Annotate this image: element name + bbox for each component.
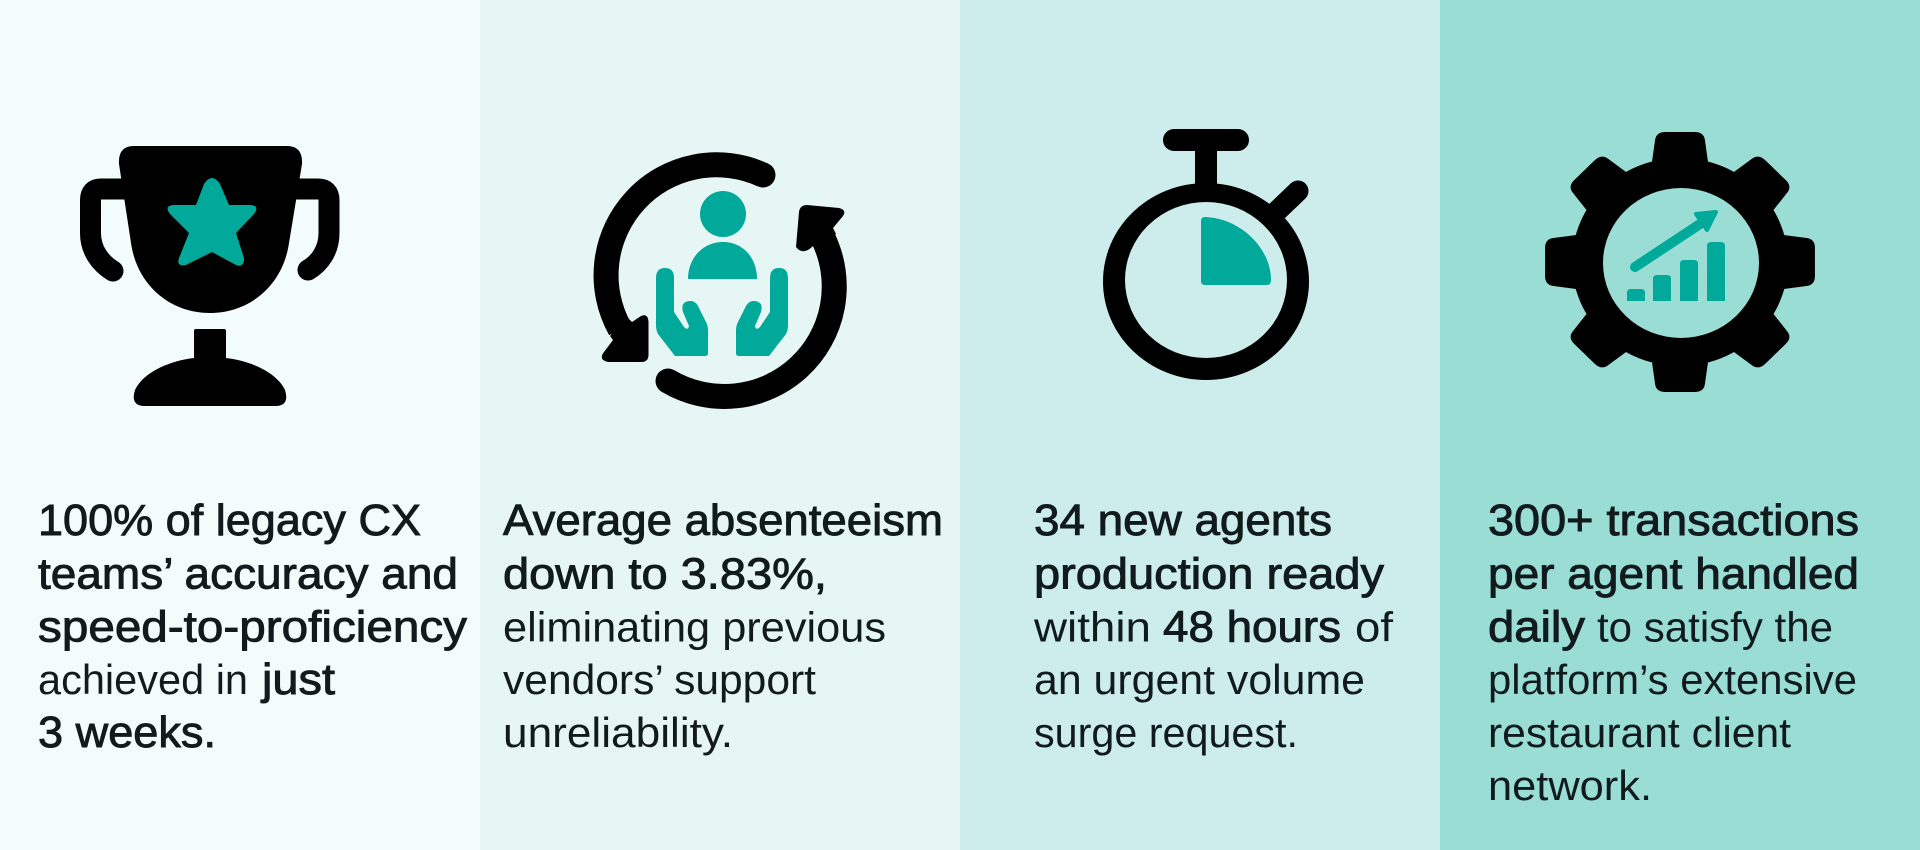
text: new agents result: 34 new agents (1034, 496, 1332, 545)
text: new agents result: within (1033, 604, 1151, 650)
text: new agents result: production ready (1034, 550, 1384, 598)
text: transactions result: network. (1488, 762, 1652, 809)
text: legacy CX teams result: teams’ accuracy and (38, 550, 458, 598)
icon: gear with rising bar chart (1545, 132, 1815, 392)
text: absenteeism result: Average absenteeism (503, 496, 943, 545)
icon: circular arrows around person in hands (602, 162, 844, 396)
text: absenteeism result: vendors’ support (503, 656, 816, 703)
text: new agents result: surge request. (1034, 709, 1298, 756)
text: transactions result: daily (1488, 602, 1585, 652)
text: transactions result: platform’s extensive (1488, 656, 1857, 703)
text: legacy CX teams result (38, 496, 467, 757)
text: transactions result: to satisfy the (1597, 604, 1833, 650)
text: new agents result: an urgent volume (1034, 656, 1365, 703)
text: absenteeism result: down to 3.83%, (503, 550, 827, 598)
text: legacy CX teams result: 3 weeks. (38, 708, 216, 757)
text: legacy CX teams result: achieved in (38, 656, 248, 703)
panel: legacy CX teams (0, 0, 480, 850)
text: absenteeism result: unreliability. (503, 709, 733, 756)
text: transactions result: restaurant client (1488, 709, 1791, 756)
text: new agents result: 48 hours (1163, 602, 1341, 652)
text: transactions result (1488, 496, 1859, 809)
text: transactions result: per agent handled (1488, 550, 1859, 598)
text: absenteeism result (503, 496, 943, 756)
text: new agents result: of (1355, 604, 1393, 650)
text: absenteeism result: eliminating previous (503, 604, 886, 650)
text: transactions result: 300+ transactions (1488, 496, 1859, 545)
text: legacy CX teams result: speed-to-proficiency (38, 602, 467, 652)
panel: transactions (1440, 0, 1920, 850)
text: legacy CX teams result: just (260, 655, 335, 704)
icon: stopwatch (1103, 129, 1309, 380)
panel: absenteeism (480, 0, 960, 850)
text: legacy CX teams result: 100% of legacy CX (38, 496, 421, 545)
text: new agents result (1033, 496, 1393, 756)
panel: new agents (960, 0, 1440, 850)
icon: trophy with star (90, 146, 329, 406)
